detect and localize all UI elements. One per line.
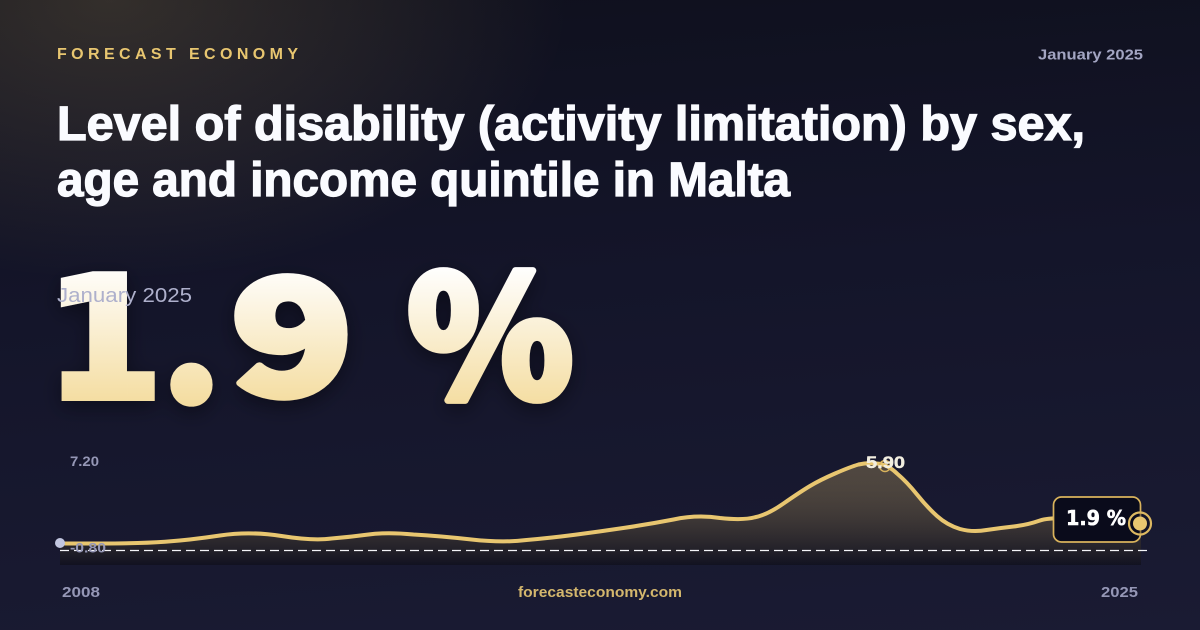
end year: 2025 [1101, 585, 1138, 601]
data line [60, 463, 1140, 544]
axis max label: 7.20 [70, 454, 99, 469]
axis min label: -0.80 [70, 540, 106, 556]
start point [55, 538, 65, 548]
current value tag [1054, 497, 1140, 542]
big value: % [407, 203, 573, 447]
big value: . [158, 183, 225, 458]
peak value: 5.90 [866, 453, 905, 472]
line chart [55, 453, 1151, 565]
date top right: January 2025 [1038, 46, 1143, 64]
end point marker [1129, 512, 1151, 534]
area under line [60, 463, 1141, 565]
big value [46, 183, 573, 458]
zero dashed line [60, 550, 1147, 552]
big value: 1 [46, 243, 162, 437]
date subtitle: January 2025 [57, 285, 192, 307]
current value tag: 1.9 % [1066, 506, 1126, 530]
website: forecasteconomy.com [518, 585, 682, 601]
title [57, 98, 1085, 207]
brand label: FORECAST ECONOMY [57, 46, 298, 63]
big value: 9 [231, 210, 353, 442]
title: age and income quintile in Malta [57, 154, 790, 207]
peak marker [880, 460, 890, 472]
start year: 2008 [62, 585, 100, 601]
title: Level of disability (activity limitation) by sex, [57, 98, 1085, 151]
